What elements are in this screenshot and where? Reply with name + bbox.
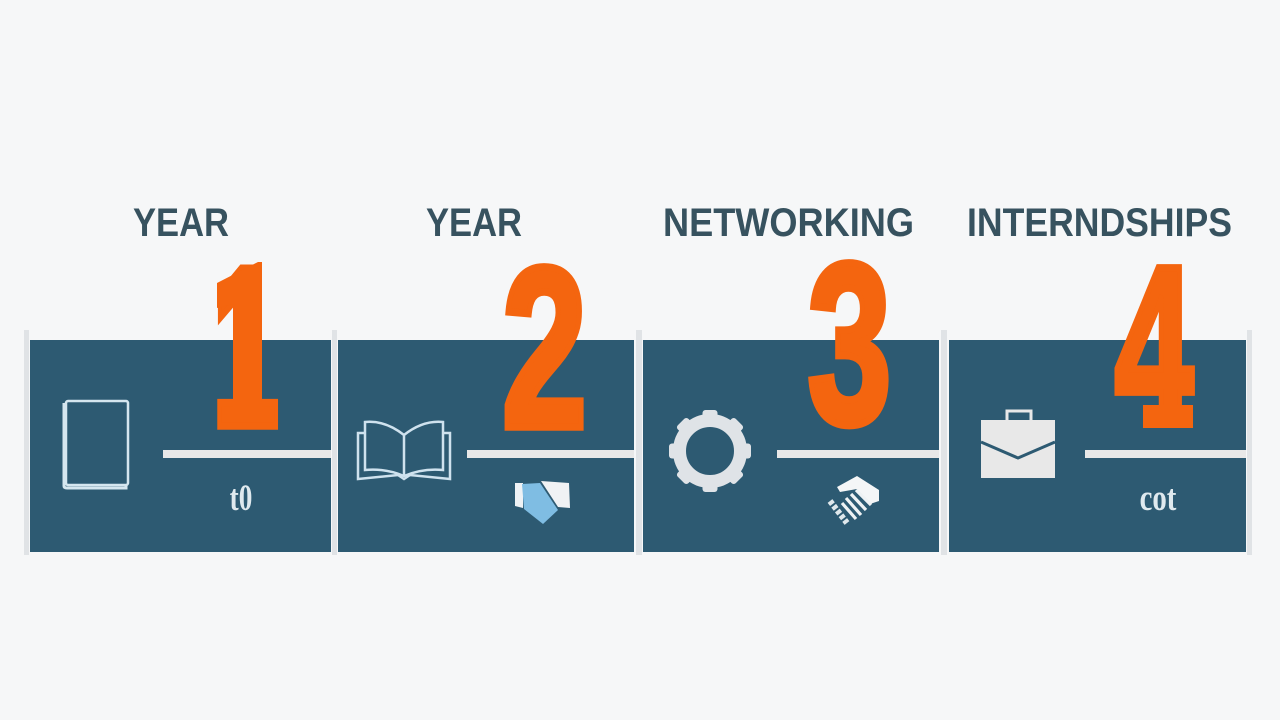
heading: year 2: YEAR — [426, 201, 522, 245]
icon: briefcase — [981, 411, 1055, 478]
panel background 3 — [643, 340, 939, 552]
panel background 1 — [30, 340, 331, 552]
small label 4: cot — [1140, 479, 1176, 519]
heading: year 1: YEAR — [133, 201, 229, 245]
heading: networking: NETWORKING — [663, 201, 914, 245]
number 3: 3 — [807, 216, 892, 473]
panel: internships — [949, 201, 1246, 552]
panel background 2 — [338, 340, 634, 552]
icon: handshake striped — [830, 476, 879, 523]
number 2: 2 — [502, 220, 587, 476]
icon: gear — [669, 410, 751, 492]
icon: closed book — [64, 401, 128, 488]
panel: year 2 — [338, 201, 634, 552]
divider 3 — [777, 450, 939, 458]
heading: internships: INTERNDSHIPS — [967, 201, 1232, 245]
divider 1 — [163, 450, 331, 458]
number 1 with flag: 1 — [212, 219, 279, 475]
divider 2 — [467, 450, 634, 458]
icon: handshake light — [515, 481, 570, 524]
icon: open book — [358, 422, 450, 479]
panel: year 1 — [30, 201, 331, 552]
small label 1: t0 — [230, 477, 252, 518]
panel: networking — [643, 201, 939, 552]
panel background 4 — [949, 340, 1246, 552]
divider 4 — [1085, 450, 1246, 458]
number 4 with foot: 4 — [1115, 220, 1193, 473]
